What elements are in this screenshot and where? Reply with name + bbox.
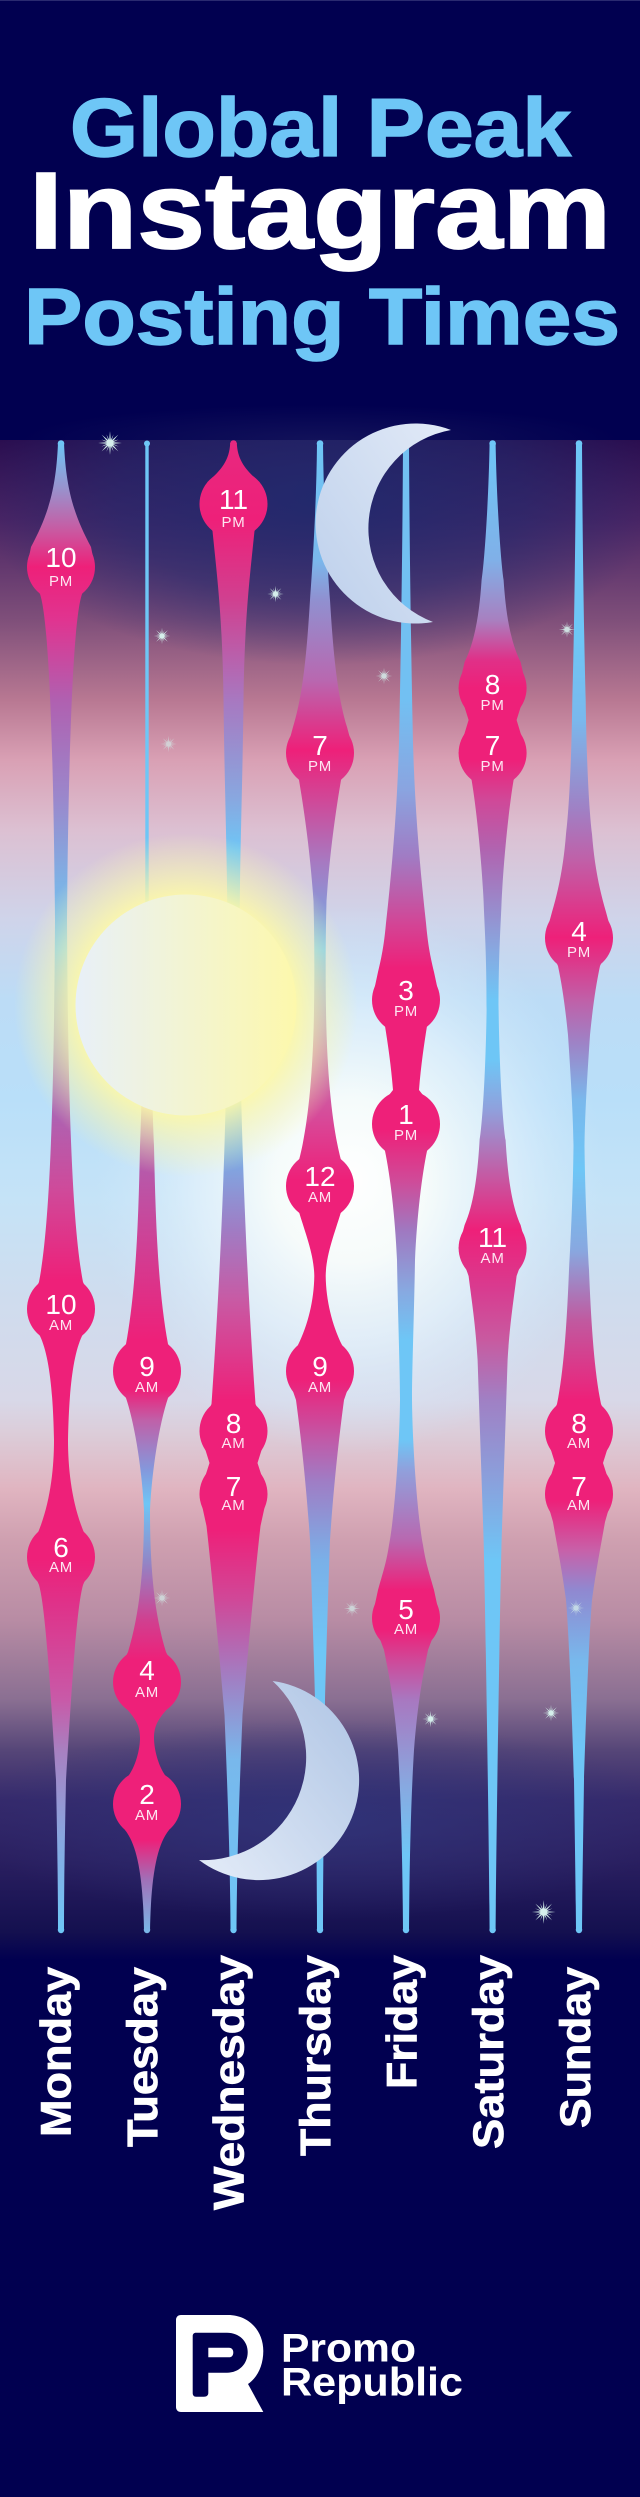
Thursday 9 AM: 9	[312, 1351, 328, 1382]
Monday 10 PM: PM	[49, 573, 73, 590]
Thursday 9 AM: AM	[308, 1379, 332, 1396]
Tuesday 9 AM	[135, 1351, 159, 1396]
Monday 6 AM: AM	[49, 1559, 73, 1576]
top crescent moon	[316, 424, 451, 624]
logo	[176, 2315, 463, 2412]
Sunday 7 AM: AM	[567, 1497, 591, 1514]
star 11	[542, 1704, 560, 1722]
Saturday label: Saturday	[465, 1955, 513, 2149]
Monday 6 AM: 6	[53, 1532, 69, 1563]
Tuesday 4 AM: AM	[135, 1684, 159, 1701]
Wednesday 11 PM	[219, 484, 248, 531]
Thursday 7 PM: 7	[312, 730, 328, 761]
Tuesday label: Tuesday	[119, 1967, 167, 2147]
star 9	[567, 1599, 585, 1617]
Wednesday 11 PM: PM	[221, 514, 246, 531]
Friday label: Friday	[379, 1955, 427, 2089]
Thursday 12 AM	[304, 1161, 336, 1206]
Tuesday 4 AM: 4	[139, 1655, 155, 1686]
Monday 10 AM	[45, 1289, 77, 1334]
Monday 10 AM: AM	[49, 1317, 73, 1334]
Friday 5 AM: 5	[398, 1594, 414, 1625]
Sunday 7 AM	[567, 1471, 591, 1514]
Sunday column	[545, 440, 613, 1933]
Tuesday 9 AM: AM	[135, 1379, 159, 1396]
Sunday 4 PM: PM	[567, 944, 591, 961]
Friday 1 PM	[394, 1099, 418, 1144]
Saturday 8 PM: PM	[481, 697, 505, 714]
Saturday 11 AM: 11	[478, 1222, 507, 1253]
Wednesday 11 PM: 11	[219, 484, 248, 515]
Wednesday 7 AM: 7	[226, 1471, 241, 1502]
Saturday 11 AM: AM	[481, 1250, 505, 1267]
Friday column	[372, 440, 440, 1933]
sun disc	[76, 894, 296, 1116]
Thursday label: Thursday	[292, 1955, 340, 2156]
Friday 5 AM: AM	[394, 1621, 418, 1638]
star 6	[160, 735, 177, 753]
Wednesday 7 AM	[221, 1471, 246, 1514]
star 5	[558, 621, 576, 638]
Thursday 12 AM: 12	[304, 1161, 336, 1192]
Friday 3 PM	[394, 975, 418, 1020]
Thursday 9 AM	[308, 1351, 332, 1396]
Friday 1 PM: 1	[398, 1099, 414, 1130]
Monday 10 PM	[45, 542, 77, 590]
Friday 1 PM: PM	[394, 1127, 418, 1144]
Sunday 7 AM: 7	[571, 1471, 587, 1502]
title line: Global Peak: Global Peak	[70, 81, 572, 174]
title	[24, 81, 620, 361]
title line: Posting Times: Posting Times	[24, 272, 620, 361]
Sunday 4 PM: 4	[571, 916, 587, 947]
title line: Instagram: Instagram	[29, 150, 611, 272]
Monday label: Monday	[33, 1967, 81, 2137]
sun glow	[14, 833, 358, 1177]
star 2	[153, 627, 171, 645]
Tuesday column	[113, 440, 181, 1933]
Wednesday label: Wednesday	[206, 1955, 254, 2210]
Sunday 8 AM: AM	[567, 1435, 591, 1452]
bottom crescent moon	[199, 1681, 359, 1880]
Friday 3 PM: PM	[394, 1003, 418, 1020]
Wednesday 8 AM	[221, 1408, 246, 1452]
Thursday column	[286, 440, 354, 1933]
Monday column	[27, 440, 95, 1933]
Tuesday 9 AM: 9	[139, 1351, 155, 1382]
Sunday 4 PM	[567, 916, 591, 961]
logo wordmark	[281, 2327, 463, 2405]
Monday 6 AM	[49, 1532, 73, 1576]
time labels	[45, 484, 591, 1824]
star 12	[531, 1900, 556, 1924]
Sunday 8 AM: 8	[571, 1408, 587, 1439]
Thursday 12 AM: AM	[308, 1189, 332, 1206]
Saturday 11 AM	[478, 1222, 507, 1267]
Monday 10 AM: 10	[45, 1289, 77, 1320]
Saturday 8 PM	[481, 669, 505, 714]
day labels	[33, 1955, 600, 2210]
star 8	[343, 1600, 361, 1617]
Tuesday 2 AM: 2	[139, 1779, 155, 1810]
Thursday 7 PM	[308, 730, 332, 775]
Tuesday 4 AM	[135, 1655, 159, 1701]
Sunday label: Sunday	[552, 1967, 600, 2128]
star 4	[375, 667, 393, 685]
Saturday 8 PM: 8	[485, 669, 500, 700]
Wednesday 8 AM: 8	[226, 1408, 241, 1439]
sky gradient panel	[0, 405, 640, 1960]
Wednesday 8 AM: AM	[221, 1435, 246, 1452]
Thursday 7 PM: PM	[308, 758, 332, 775]
logo wordmark: Promo	[281, 2327, 416, 2371]
star 1	[98, 431, 122, 455]
Friday 3 PM: 3	[398, 975, 414, 1006]
star 3	[267, 585, 284, 603]
Monday 10 PM: 10	[45, 542, 77, 573]
star 10	[422, 1710, 439, 1728]
stars	[98, 431, 585, 1924]
Saturday 7 PM	[481, 730, 505, 775]
icon: PromoRepublic R mark	[176, 2315, 263, 2412]
Saturday 7 PM: PM	[481, 758, 505, 775]
logo wordmark: Republic	[281, 2361, 463, 2405]
Sunday 8 AM	[567, 1408, 591, 1452]
Saturday 7 PM: 7	[485, 730, 500, 761]
Tuesday 2 AM	[135, 1779, 159, 1824]
Saturday column	[459, 440, 527, 1933]
Wednesday column	[200, 440, 268, 1933]
Friday 5 AM	[394, 1594, 418, 1638]
Wednesday 7 AM: AM	[221, 1497, 246, 1514]
Tuesday 2 AM: AM	[135, 1807, 159, 1824]
star 7	[153, 1589, 171, 1607]
